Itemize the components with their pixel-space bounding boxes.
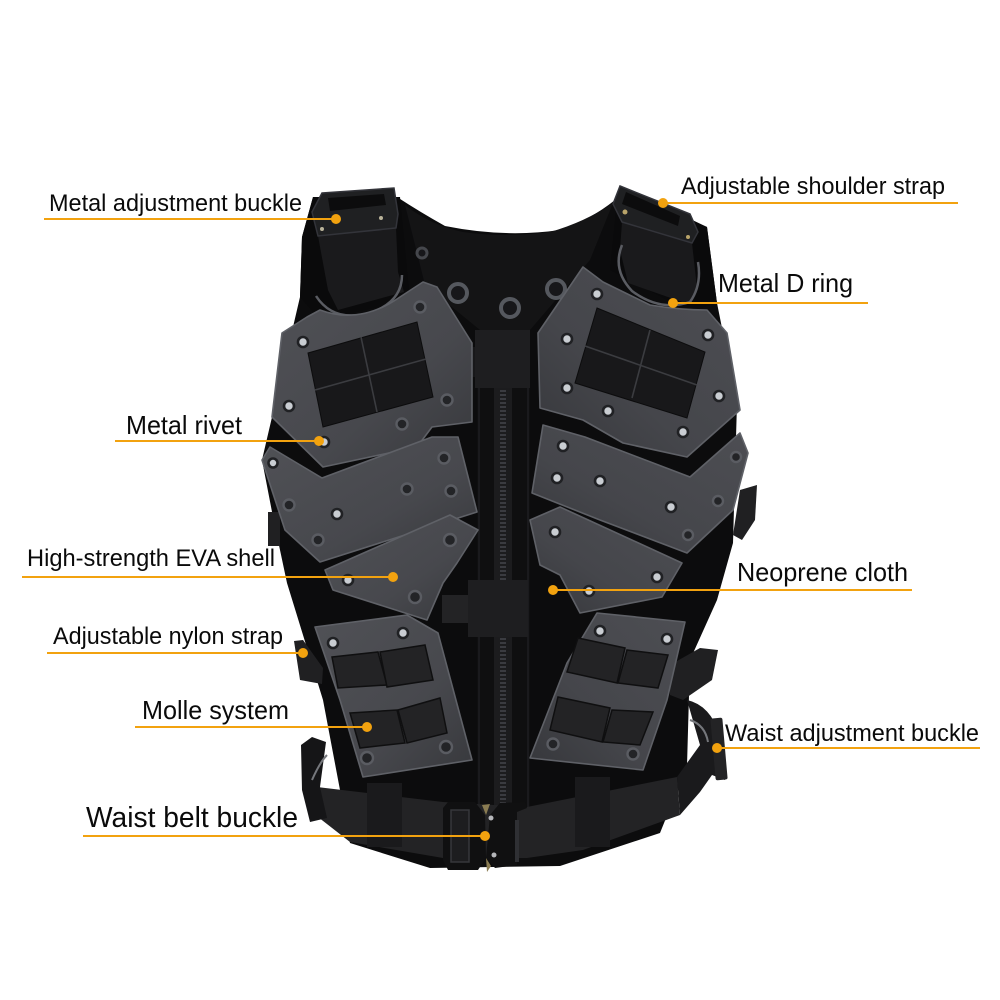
middle left plate: [262, 437, 477, 562]
callout: Adjustable nylon strap: [47, 623, 308, 658]
callout: Molle system: [135, 695, 372, 732]
collar snaps: [417, 248, 565, 317]
zipper closure tabs: [440, 330, 530, 637]
callout: Adjustable shoulder strap: [658, 173, 958, 208]
vest body: [262, 195, 737, 868]
callout: Metal adjustment buckle: [44, 190, 341, 224]
callout: Waist belt buckle: Waist belt buckle: [86, 802, 298, 834]
centre zipper: [477, 370, 530, 860]
vest illustration: [262, 186, 757, 872]
callout: Metal D ring: Metal D ring: [718, 268, 853, 298]
left belt loop: [301, 737, 327, 822]
side straps: [268, 485, 757, 700]
left shoulder strap: [300, 188, 410, 320]
lower right molle pouch: [530, 613, 685, 770]
middle right plate: [532, 425, 748, 553]
callout: Metal rivet: Metal rivet: [126, 410, 243, 440]
callout: Metal adjustment buckle: Metal adjustment buckle: [49, 190, 302, 217]
inner collar lining: [405, 203, 613, 330]
callout: Neoprene cloth: Neoprene cloth: [737, 557, 908, 587]
callout: Adjustable nylon strap: Adjustable nylon strap: [53, 623, 283, 650]
upper right chest plate: [538, 267, 740, 457]
buckle: [443, 802, 486, 870]
right shoulder strap: [610, 186, 717, 312]
callout: Molle system: Molle system: [142, 695, 289, 725]
lower left plate: [325, 515, 478, 620]
callout: Neoprene cloth: [548, 557, 912, 595]
callout: Metal rivet: [115, 410, 324, 446]
right belt loop: [677, 700, 725, 815]
callout: Metal D ring: [668, 268, 868, 308]
callout: High-strength EVA shell: [22, 545, 398, 582]
callout: Adjustable shoulder strap: Adjustable shoulder strap: [681, 173, 945, 200]
callout: Waist belt buckle: [83, 802, 490, 841]
upper left chest plate: [272, 282, 472, 467]
waist belt: [301, 700, 728, 872]
lower right plate: [530, 507, 682, 613]
lower left molle pouch: [315, 615, 472, 777]
callout: High-strength EVA shell: High-strength EVA shell: [27, 545, 275, 572]
callout: Waist adjustment buckle: Waist adjustment buckle: [725, 720, 979, 747]
